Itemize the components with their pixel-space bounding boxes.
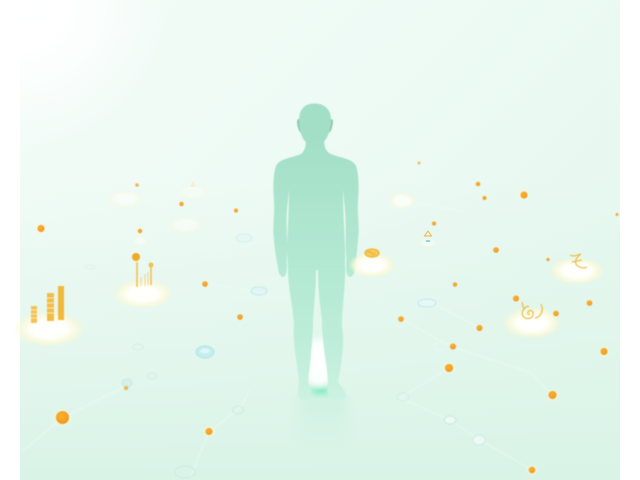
icon: lollipop bars <box>132 253 154 287</box>
figure: ears <box>297 119 333 133</box>
platform: bar chart, left <box>13 286 85 347</box>
platform: snail shaped icon <box>502 302 562 339</box>
icon: gold knot <box>365 249 379 257</box>
figure: legs and feet <box>288 262 346 400</box>
platform: lollipop chart <box>113 253 173 309</box>
orange nodes <box>34 162 618 477</box>
human figure <box>273 104 359 400</box>
icon: bars <box>31 286 64 323</box>
floor glow under figure <box>297 334 348 466</box>
figure: torso and arms <box>273 136 359 277</box>
figure: head <box>299 104 331 144</box>
network lines on floor <box>22 200 552 478</box>
platform: back right small <box>388 192 437 248</box>
blue rings on floor <box>85 234 485 478</box>
icon: small triangle <box>424 231 432 236</box>
platform: centre right with icon <box>348 249 396 278</box>
icon: gold glyph <box>570 254 587 268</box>
icon: gold spiral <box>522 302 542 319</box>
platform: back left faint pads <box>106 181 209 246</box>
platform: far right with icon <box>549 254 605 285</box>
